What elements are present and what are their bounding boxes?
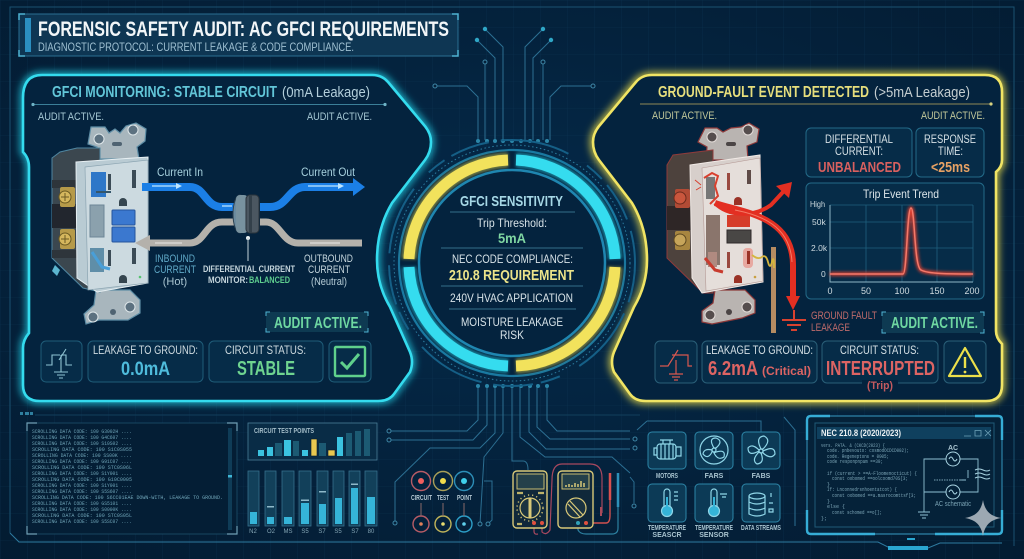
metric: leakage to ground: LEAKAGE TO GROUND:	[706, 343, 813, 357]
icon: current transformer ring	[233, 195, 259, 233]
label: current in: Current In	[157, 165, 203, 179]
icon: thermometer scale	[662, 489, 678, 516]
chart: trip event trend: 0	[827, 286, 833, 296]
AC schematic	[918, 445, 990, 518]
panel: stable circuit	[23, 75, 431, 401]
code listing: code responpnpam ==30;	[827, 459, 883, 465]
icon: warning triangle	[944, 341, 986, 383]
label: ground fault leakage: GROUND FAULT	[811, 310, 877, 322]
icon: switch schematic	[41, 341, 82, 382]
audit label right: AUDIT ACTIVE.	[307, 111, 372, 123]
icon labels: SENSOR	[699, 532, 729, 539]
icon: faulted outlet	[667, 123, 763, 324]
chart: level meters: S7	[318, 529, 326, 535]
panel: scrolling data log: SCROLLING DATA CODE: 100 S1Y001 ....	[32, 482, 132, 489]
chart title: Trip Event Trend	[863, 187, 939, 201]
chart title: CIRCUIT TEST POINTS	[254, 426, 314, 435]
monitor pointer	[246, 236, 250, 261]
panel: scrolling data log	[27, 423, 237, 534]
label: inbound current: CURRENT	[154, 264, 196, 276]
wire: neutral current out	[135, 222, 362, 251]
panel heading: GROUND-FAULT EVENT DETECTED	[658, 84, 869, 101]
chart: level meters: 80	[368, 529, 375, 535]
label: ground fault leakage	[811, 310, 877, 334]
panel heading: (0mA Leakage)	[282, 84, 370, 101]
metric: circuit status: STABLE	[237, 358, 295, 380]
gauge title: GFCI SENSITIVITY	[460, 193, 563, 210]
panel: scrolling data log: SCROLLING DATA CODE: 100 S10S02 ....	[32, 440, 132, 447]
icon labels	[648, 473, 781, 539]
audit badge	[266, 312, 368, 332]
chart: circuit test points	[248, 423, 377, 460]
panel: scrolling data log: SCROLLING DATA CODE: 100 SS00K ....	[32, 452, 132, 459]
subtitle: DIAGNOSTIC PROTOCOL: CURRENT LEAKAGE & CODE COMPLIANCE.	[38, 40, 354, 54]
icon labels: FARS	[705, 473, 724, 480]
NEC compliance	[449, 252, 574, 284]
label: outbound current: OUTBOUND	[304, 253, 353, 265]
test point connectors: POINT	[457, 495, 473, 502]
heading: FORENSIC SAFETY AUDIT: AC GFCI REQUIREMENTS	[38, 18, 449, 41]
label: current out: Current Out	[301, 165, 356, 179]
AC schematic: AC	[948, 445, 958, 452]
AC schematic: AC schematic	[935, 501, 971, 508]
icon labels: TEMPERATURE	[695, 525, 733, 532]
icon labels: DATA STREAMS	[741, 525, 781, 532]
panel: scrolling data log: SCROLLING DATA CODE: 100 S6CC01EAE DOWN-WITH, LEAKAGE TO GROUND.	[32, 494, 223, 501]
NEC compliance: 210.8 REQUIREMENT	[449, 267, 574, 284]
chart: level meters: N2	[249, 529, 257, 535]
label: differential monitor: MONITOR:	[208, 275, 248, 286]
icon labels: SEASCR	[652, 532, 682, 539]
panel: scrolling data log: SCROLLING DATA CODE: 100 S0000K ....	[32, 506, 132, 513]
ground rod	[771, 247, 776, 333]
chart: trip event trend: 0	[821, 269, 826, 279]
panel: NEC code window	[807, 416, 1002, 534]
ground wire to rod	[752, 255, 774, 268]
audit label right: AUDIT ACTIVE.	[921, 110, 985, 122]
metric: leakage to ground	[702, 341, 817, 383]
panel: scrolling data log: SCROLLING DATA CODE: 100 G4C607 ....	[32, 434, 132, 441]
metric: leakage to ground	[88, 341, 203, 382]
panel: scrolling data log: SCROLLING DATA CODE: 100 GS5101 ....	[32, 500, 132, 507]
title banner	[19, 14, 458, 56]
icon labels: FABS	[752, 473, 771, 480]
code listing	[821, 443, 917, 522]
metric: circuit status: (Trip)	[867, 380, 893, 392]
code listing: const oobomed ==oolcoomd70S[3;	[832, 476, 908, 482]
metric: circuit status	[209, 341, 323, 382]
metric: differential current	[806, 128, 912, 177]
chart: trip event trend	[806, 183, 984, 299]
window title: NEC 210.8 (2020/2023)	[821, 428, 901, 438]
NEC compliance: NEC CODE COMPLIANCE:	[452, 252, 573, 266]
icon: fan blades	[748, 436, 775, 464]
moisture risk	[461, 315, 563, 342]
metric: differential current: DIFFERENTIAL	[825, 132, 893, 146]
metric: differential current: CURRENT:	[835, 144, 883, 158]
metric: circuit status	[822, 341, 938, 392]
label: differential monitor	[203, 264, 295, 286]
code listing: const schomed ==o[];	[832, 510, 882, 516]
test point connectors	[411, 472, 474, 532]
chart: level meters: S5	[301, 529, 309, 535]
metric: response time: <25ms	[931, 159, 970, 176]
icon labels: MOTORS	[656, 473, 678, 480]
HVAC application: 240V HVAC APPLICATION	[450, 291, 573, 305]
chart: level meters: S5	[334, 529, 342, 535]
wire: hot current in	[142, 178, 365, 207]
trip threshold	[477, 216, 547, 246]
code listing: }	[827, 499, 830, 505]
icon: fan round	[700, 436, 728, 464]
arrow: leakage to ground	[715, 182, 800, 310]
panel heading: (>5mA Leakage)	[874, 84, 970, 101]
chart: trip event trend: 150	[929, 286, 945, 296]
label: inbound current: INBOUND	[155, 253, 195, 265]
code listing: If: Lnconnedrsnhoentatcot) {	[827, 487, 897, 493]
icon: multimeters	[513, 464, 618, 534]
code listing: if (current > ==A-Floomenocticut) {	[827, 471, 917, 477]
icon: motor	[654, 440, 681, 459]
audit badge: AUDIT ACTIVE.	[274, 315, 362, 332]
panel: ground fault event	[593, 75, 1002, 401]
icon grid: equipment	[648, 432, 781, 539]
label: outbound current	[304, 253, 353, 288]
icon: sparkle watermark	[965, 500, 1001, 536]
chart: trip event trend: 2.0k	[811, 243, 828, 253]
code listing: code. pnbevouto: cosmodOCDCD002);	[827, 448, 909, 454]
icon: tripped switch	[655, 341, 697, 383]
code listing: else {	[827, 504, 845, 510]
icon: ground symbol	[782, 310, 806, 330]
chart: level meters: O2	[267, 529, 276, 535]
metric: circuit status: CIRCUIT STATUS:	[840, 343, 919, 357]
label: ground fault leakage: LEAKAGE	[811, 322, 850, 334]
metric: leakage to ground: (Critical)	[762, 364, 811, 378]
panel: scrolling data log: SCROLLING DATA CODE: 100 S5SC07 ....	[32, 518, 132, 525]
test point connectors: TEST	[437, 495, 449, 502]
code listing: vers. PATA. & (CKCD(2023) {	[821, 443, 885, 449]
panel heading: GFCI MONITORING: STABLE CIRCUIT	[52, 84, 277, 101]
metric: leakage to ground: 6.2mA	[708, 358, 758, 380]
audit label left: AUDIT ACTIVE.	[38, 111, 104, 123]
metric: response time: RESPONSE	[924, 132, 976, 146]
metric: leakage to ground: LEAKAGE TO GROUND:	[93, 343, 198, 357]
chart: trip event trend: 50k	[812, 217, 826, 227]
panel: scrolling data log: SCROLLING DATA CODE: 100 STC0S05L	[32, 512, 132, 519]
chart: trip event trend: 50	[861, 286, 871, 296]
chart: trip event trend: 100	[894, 286, 910, 296]
label: inbound current	[154, 253, 196, 288]
chart: trip event trend: 200	[964, 286, 980, 296]
audit badge: AUDIT ACTIVE.	[891, 315, 978, 332]
chart: level meters: S7	[351, 529, 359, 535]
label: inbound current: (Hot)	[163, 276, 187, 288]
code listing: };	[821, 516, 827, 522]
moisture risk: RISK	[500, 328, 524, 342]
code listing: }	[827, 482, 830, 488]
icon: GFCI outlet	[52, 123, 148, 324]
moisture risk: MOISTURE LEAKAGE	[461, 315, 563, 329]
metric: circuit status: INTERRUPTED	[826, 358, 935, 380]
chart: level meters	[248, 471, 377, 535]
trip threshold: Trip Threshold:	[477, 216, 547, 230]
metric: circuit status: CIRCUIT STATUS:	[225, 343, 306, 357]
icon: database	[749, 493, 773, 516]
label: outbound current: (Neutral)	[311, 276, 347, 288]
label: differential monitor: BALANCED	[249, 275, 290, 286]
metric: response time: TIME:	[938, 144, 963, 158]
metric: response time	[916, 128, 984, 177]
label: outbound current: CURRENT	[308, 264, 350, 276]
chart: level meters: MS	[284, 529, 292, 535]
label: differential monitor: DIFFERENTIAL CURRENT	[203, 264, 295, 275]
audit badge	[882, 312, 984, 333]
panel: scrolling data log: SCROLLING DATA CODE: 100 G3002H ....	[32, 428, 132, 435]
panel: scrolling data log: SCROLLING DATA CODE: 100 STC0S06L	[32, 464, 132, 471]
icon: check box	[329, 341, 371, 382]
panel: scrolling data log: SCROLLING DATA CODE: 100 S1C0S055	[32, 446, 132, 453]
chart: trip event trend: High	[810, 199, 825, 209]
code listing: const oobomed ==a.masrocomttsf[3;	[832, 493, 916, 499]
panel: scrolling data log: SCROLLING DATA CODE: 100 S1Y001 ....	[32, 470, 132, 477]
trip threshold: 5mA	[498, 230, 526, 246]
panel: scrolling data log: SCROLLING DATA CODE: 100 G91C07 ....	[32, 458, 132, 465]
central gauge	[389, 140, 635, 386]
metric: leakage to ground: 0.0mA	[121, 359, 170, 380]
icon labels: TEMPERATURE	[648, 525, 686, 532]
test point connectors: CIRCUIT	[411, 495, 433, 502]
icon: thermometer sensor	[708, 489, 727, 516]
panel: scrolling data log: SCROLLING DATA CODE: 100 G10C0005	[32, 476, 132, 483]
metric: differential current: UNBALANCED	[818, 159, 901, 176]
audit label left: AUDIT ACTIVE.	[652, 110, 717, 122]
panel: scrolling data log: SCROLLING DATA CODE: 100 S5S607 ....	[32, 488, 132, 495]
code listing: code. Regeneptons = 0005;	[827, 454, 889, 460]
